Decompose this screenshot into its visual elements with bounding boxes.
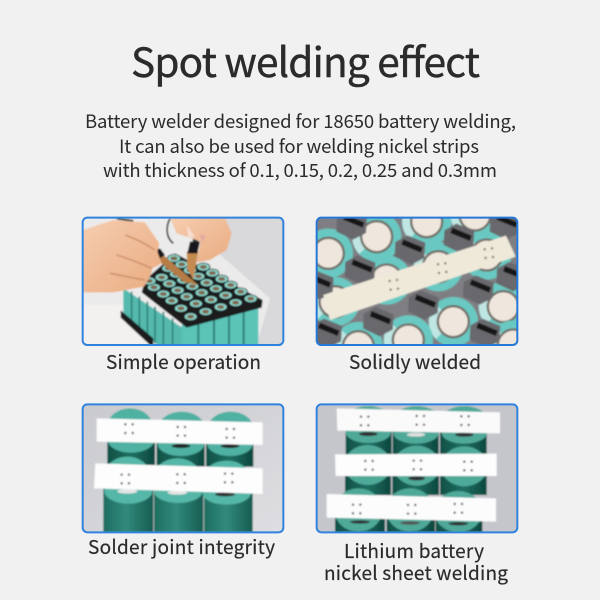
panel: solidly welded photo: [316, 216, 518, 346]
left side cell columns: [123, 288, 183, 345]
panel: lithium battery nickel sheet photo: [317, 404, 517, 532]
wire: [167, 218, 173, 243]
label: lithium battery nickel sheet welding: Lithium battery: [344, 537, 484, 564]
nickel strips: [97, 418, 263, 445]
probes: [157, 252, 198, 285]
intro text block: with thickness of 0.1, 0.15, 0.2, 0.25 and 0.3mm: [103, 157, 497, 183]
panel: simple operation photo: [83, 218, 283, 345]
label: simple operation: Simple operation: [106, 348, 261, 375]
label: lithium battery nickel sheet welding: [324, 537, 508, 586]
panel: solder joint integrity photo: [83, 404, 283, 532]
intro text block: It can also be used for welding nickel strips: [119, 133, 479, 159]
label: solder joint integrity: Solder joint integrity: [88, 533, 275, 560]
label: lithium battery nickel sheet welding: nickel sheet welding: [324, 559, 508, 586]
nickel strip: [323, 236, 516, 320]
intro text block: Battery welder designed for 18650 battery welding,: [85, 108, 516, 134]
right side cell columns: [180, 308, 260, 344]
label: solidly welded: Solidly welded: [349, 348, 481, 375]
right hand: [170, 218, 232, 262]
holder: [121, 310, 153, 345]
nickel strips: [337, 408, 500, 433]
intro text block: [85, 108, 516, 183]
left hand: [83, 220, 162, 292]
title: Spot welding effect: [131, 30, 480, 89]
